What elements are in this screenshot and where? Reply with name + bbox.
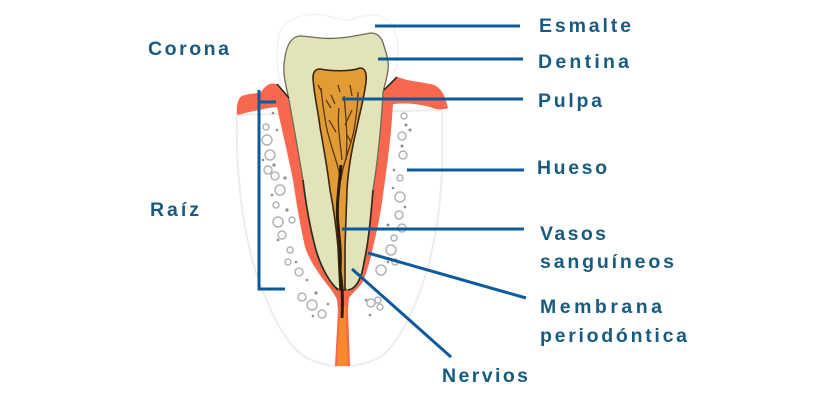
leader: nervios — [352, 269, 451, 357]
pulp vessels and nerves — [318, 85, 358, 318]
dentin — [284, 33, 388, 290]
label: nervios: Nervios — [442, 365, 528, 387]
enamel — [277, 15, 398, 84]
apical canal — [337, 306, 348, 366]
label: corona: Corona — [148, 38, 229, 60]
label: esmalte: Esmalte — [539, 15, 631, 37]
label: hueso: Hueso — [537, 157, 607, 179]
leader: hueso — [407, 168, 524, 172]
pulp — [313, 68, 366, 290]
label: dentina: Dentina — [538, 51, 629, 73]
label: vasos sanguineos — [540, 223, 674, 273]
bone specks — [262, 112, 412, 317]
label: raiz: Raíz — [150, 199, 199, 221]
leader: dentina — [378, 58, 523, 60]
label: vasos sanguineos: Vasos — [540, 223, 606, 245]
leader: pulpa — [342, 98, 523, 100]
leader: esmalte — [375, 24, 520, 28]
leader: vasos sanguineos — [342, 228, 524, 230]
label: pulpa: Pulpa — [538, 90, 602, 112]
label: membrana periodontica: Membrana — [540, 296, 662, 318]
gum and periodontal membrane — [237, 77, 448, 366]
bone — [237, 110, 442, 366]
bracket: root — [259, 90, 285, 289]
label: membrana periodontica — [540, 296, 687, 347]
label: membrana periodontica: periodóntica — [540, 325, 687, 347]
dark root outlines — [277, 77, 397, 290]
leader: membrana periodontica — [368, 253, 526, 298]
left bone texture — [262, 124, 326, 318]
label: vasos sanguineos: sanguíneos — [540, 251, 674, 273]
right bone texture — [367, 113, 407, 310]
